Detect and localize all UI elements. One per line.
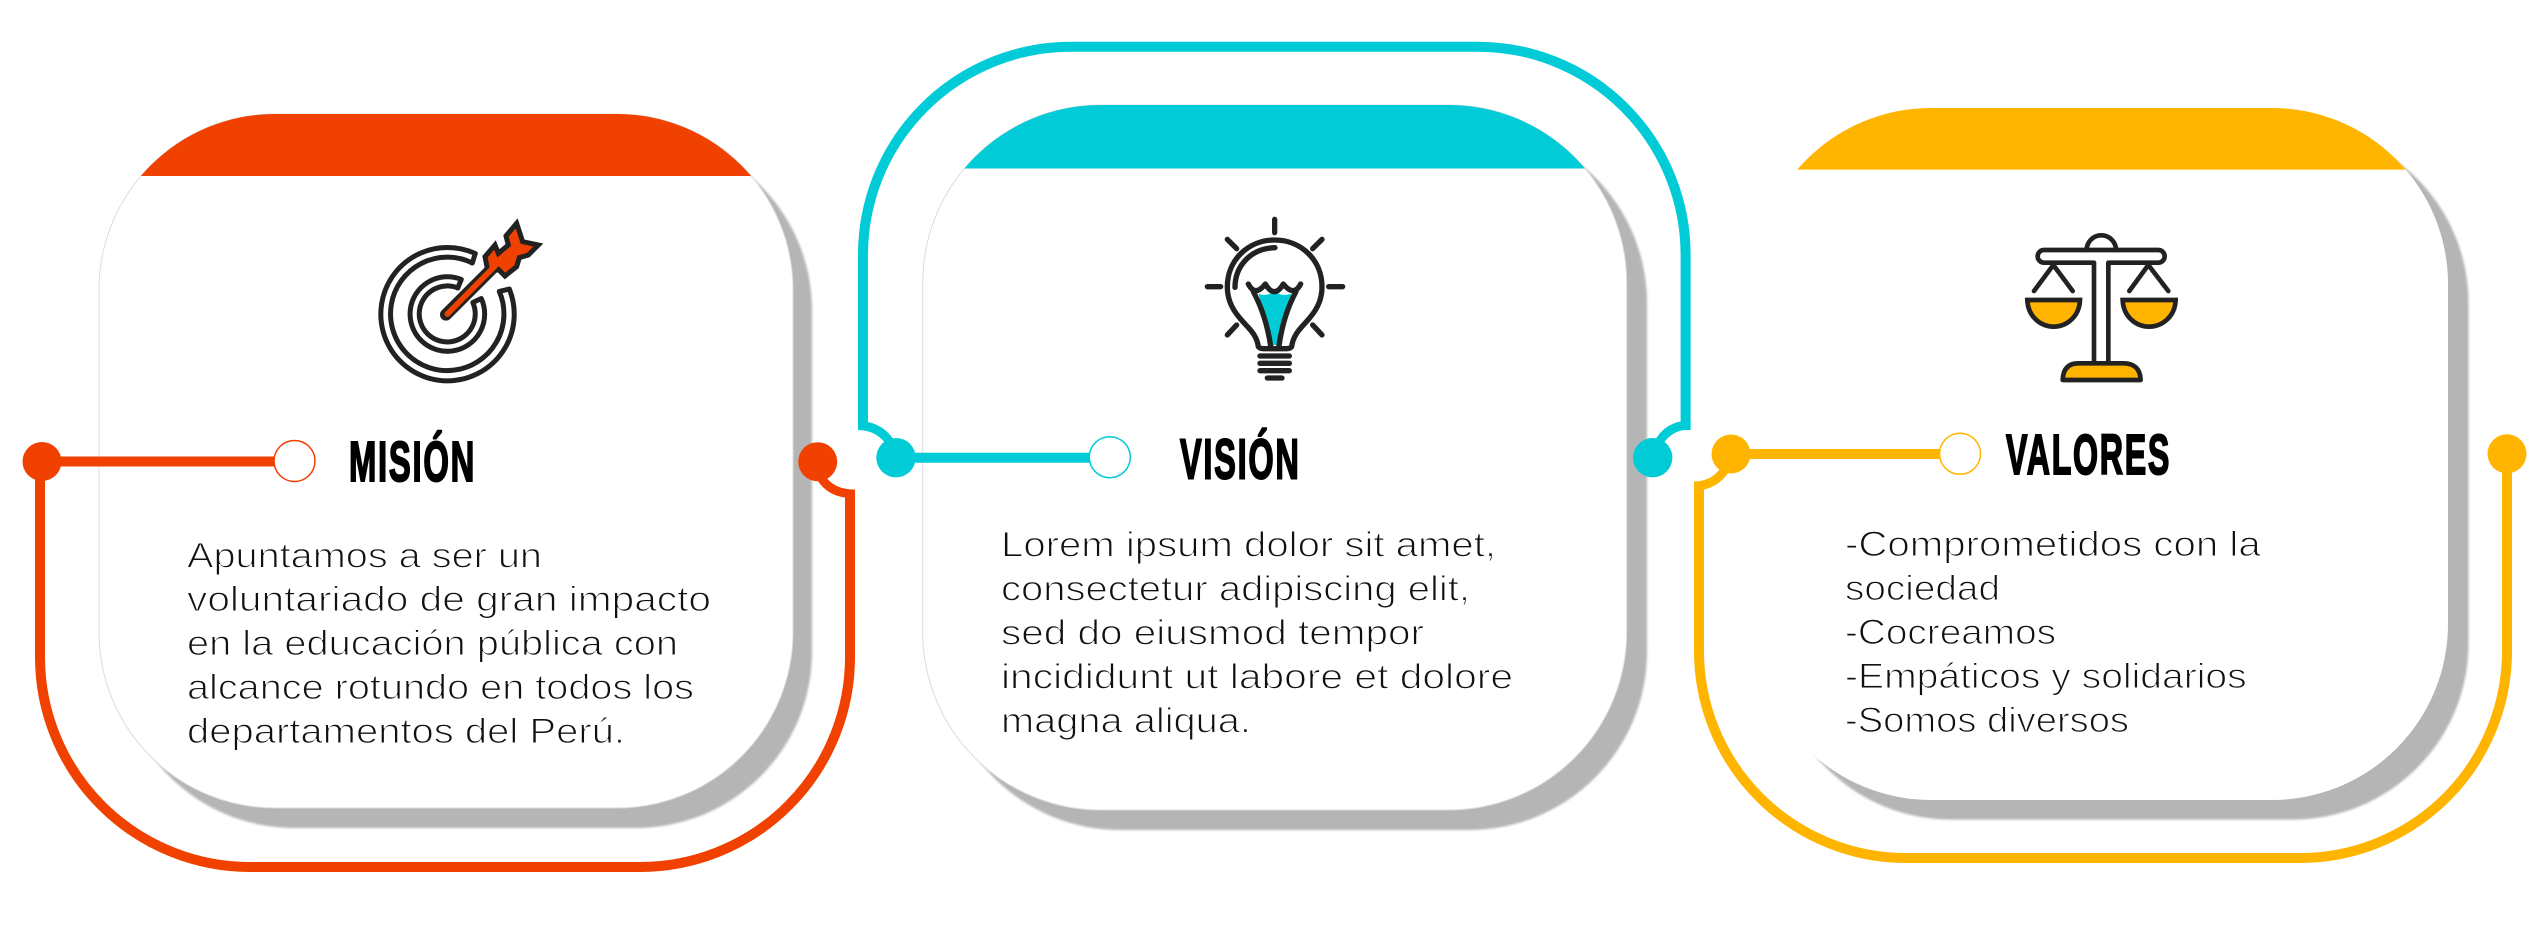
visión heading: VISIÓN xyxy=(1180,428,1301,492)
panel: misión xyxy=(99,114,812,828)
misión body text: departamentos del Perú. xyxy=(187,712,625,751)
icon: target with arrow xyxy=(381,223,538,381)
icon: light bulb xyxy=(1207,219,1343,378)
visión body text: incididunt ut labore et dolore xyxy=(1001,657,1513,696)
misión card shadow xyxy=(118,134,812,828)
misión body text: alcance rotundo en todos los xyxy=(187,668,694,707)
valores body text xyxy=(1845,525,2261,740)
misión body text xyxy=(187,536,711,751)
valores body text: sociedad xyxy=(1845,569,2000,608)
valores card xyxy=(1755,108,2448,800)
connector: yellow frame xyxy=(1694,433,2526,858)
connector: orange frame xyxy=(22,440,855,867)
visión header band xyxy=(964,105,1585,168)
panel: valores xyxy=(1755,108,2468,820)
valores card shadow xyxy=(1775,127,2468,820)
misión body text: en la educación pública con xyxy=(187,624,678,663)
visión card xyxy=(923,105,1627,810)
misión heading: MISIÓN xyxy=(349,430,476,494)
valores body text: -Comprometidos con la xyxy=(1845,525,2261,564)
valores heading: VALORES xyxy=(2006,423,2171,487)
visión body text: Lorem ipsum dolor sit amet, xyxy=(1001,526,1496,565)
icon: balance scale xyxy=(2027,235,2176,380)
visión body text: sed do eiusmod tempor xyxy=(1001,614,1424,652)
visión body text xyxy=(1001,526,1513,740)
valores header band xyxy=(1797,108,2406,170)
valores body text: -Cocreamos xyxy=(1845,613,2056,652)
panel: visión xyxy=(923,105,1647,830)
connector: cyan frame xyxy=(858,47,1691,478)
valores body text: -Somos diversos xyxy=(1845,701,2129,740)
misión body text: voluntariado de gran impacto xyxy=(187,580,711,619)
misión card xyxy=(99,114,793,808)
visión body text: consectetur adipiscing elit, xyxy=(1001,570,1470,608)
valores body text: -Empáticos y solidarios xyxy=(1845,657,2247,696)
misión header band xyxy=(141,114,751,176)
visión card shadow xyxy=(942,125,1647,830)
visión body text: magna aliqua. xyxy=(1001,701,1251,740)
misión body text: Apuntamos a ser un xyxy=(187,536,542,575)
